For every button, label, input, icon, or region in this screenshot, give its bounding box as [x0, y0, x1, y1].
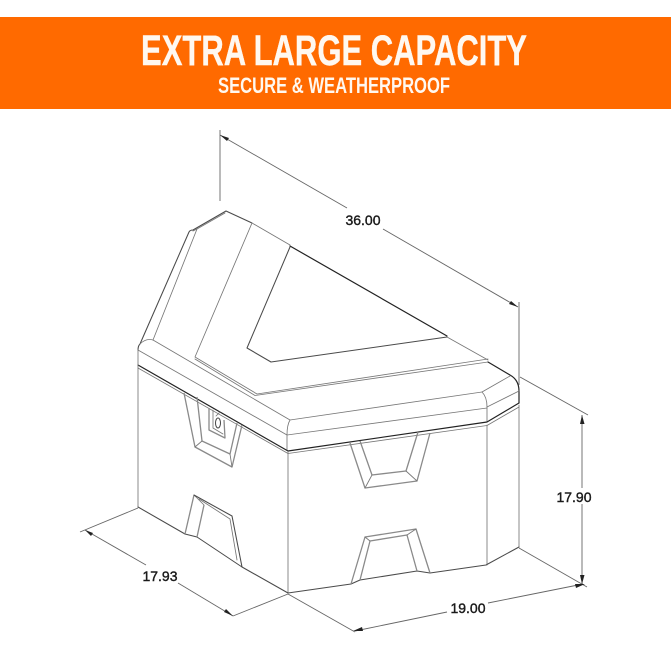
header banner — [0, 17, 671, 109]
right foot recess — [351, 529, 430, 584]
left latch recess — [184, 393, 242, 467]
right latch recess — [350, 432, 430, 488]
label 17.90: 17.90 — [556, 489, 592, 505]
dimension: 17.93 depth — [80, 508, 288, 616]
label 19.00: 19.00 — [450, 600, 486, 616]
box lid — [138, 211, 519, 454]
dimension: 19.00 width — [288, 548, 587, 632]
label 36.00: 36.00 — [345, 212, 381, 228]
storage box line drawing — [138, 211, 519, 593]
box body — [138, 350, 519, 593]
dimension: 17.90 height — [520, 377, 592, 585]
subtitle: SECURE & WEATHERPROOF — [218, 73, 450, 98]
padlock hasp — [209, 408, 225, 438]
label 17.93: 17.93 — [142, 568, 178, 584]
left foot recess — [185, 495, 242, 567]
dimension: 36.00 length — [220, 130, 519, 385]
title: EXTRA LARGE CAPACITY — [141, 27, 527, 75]
